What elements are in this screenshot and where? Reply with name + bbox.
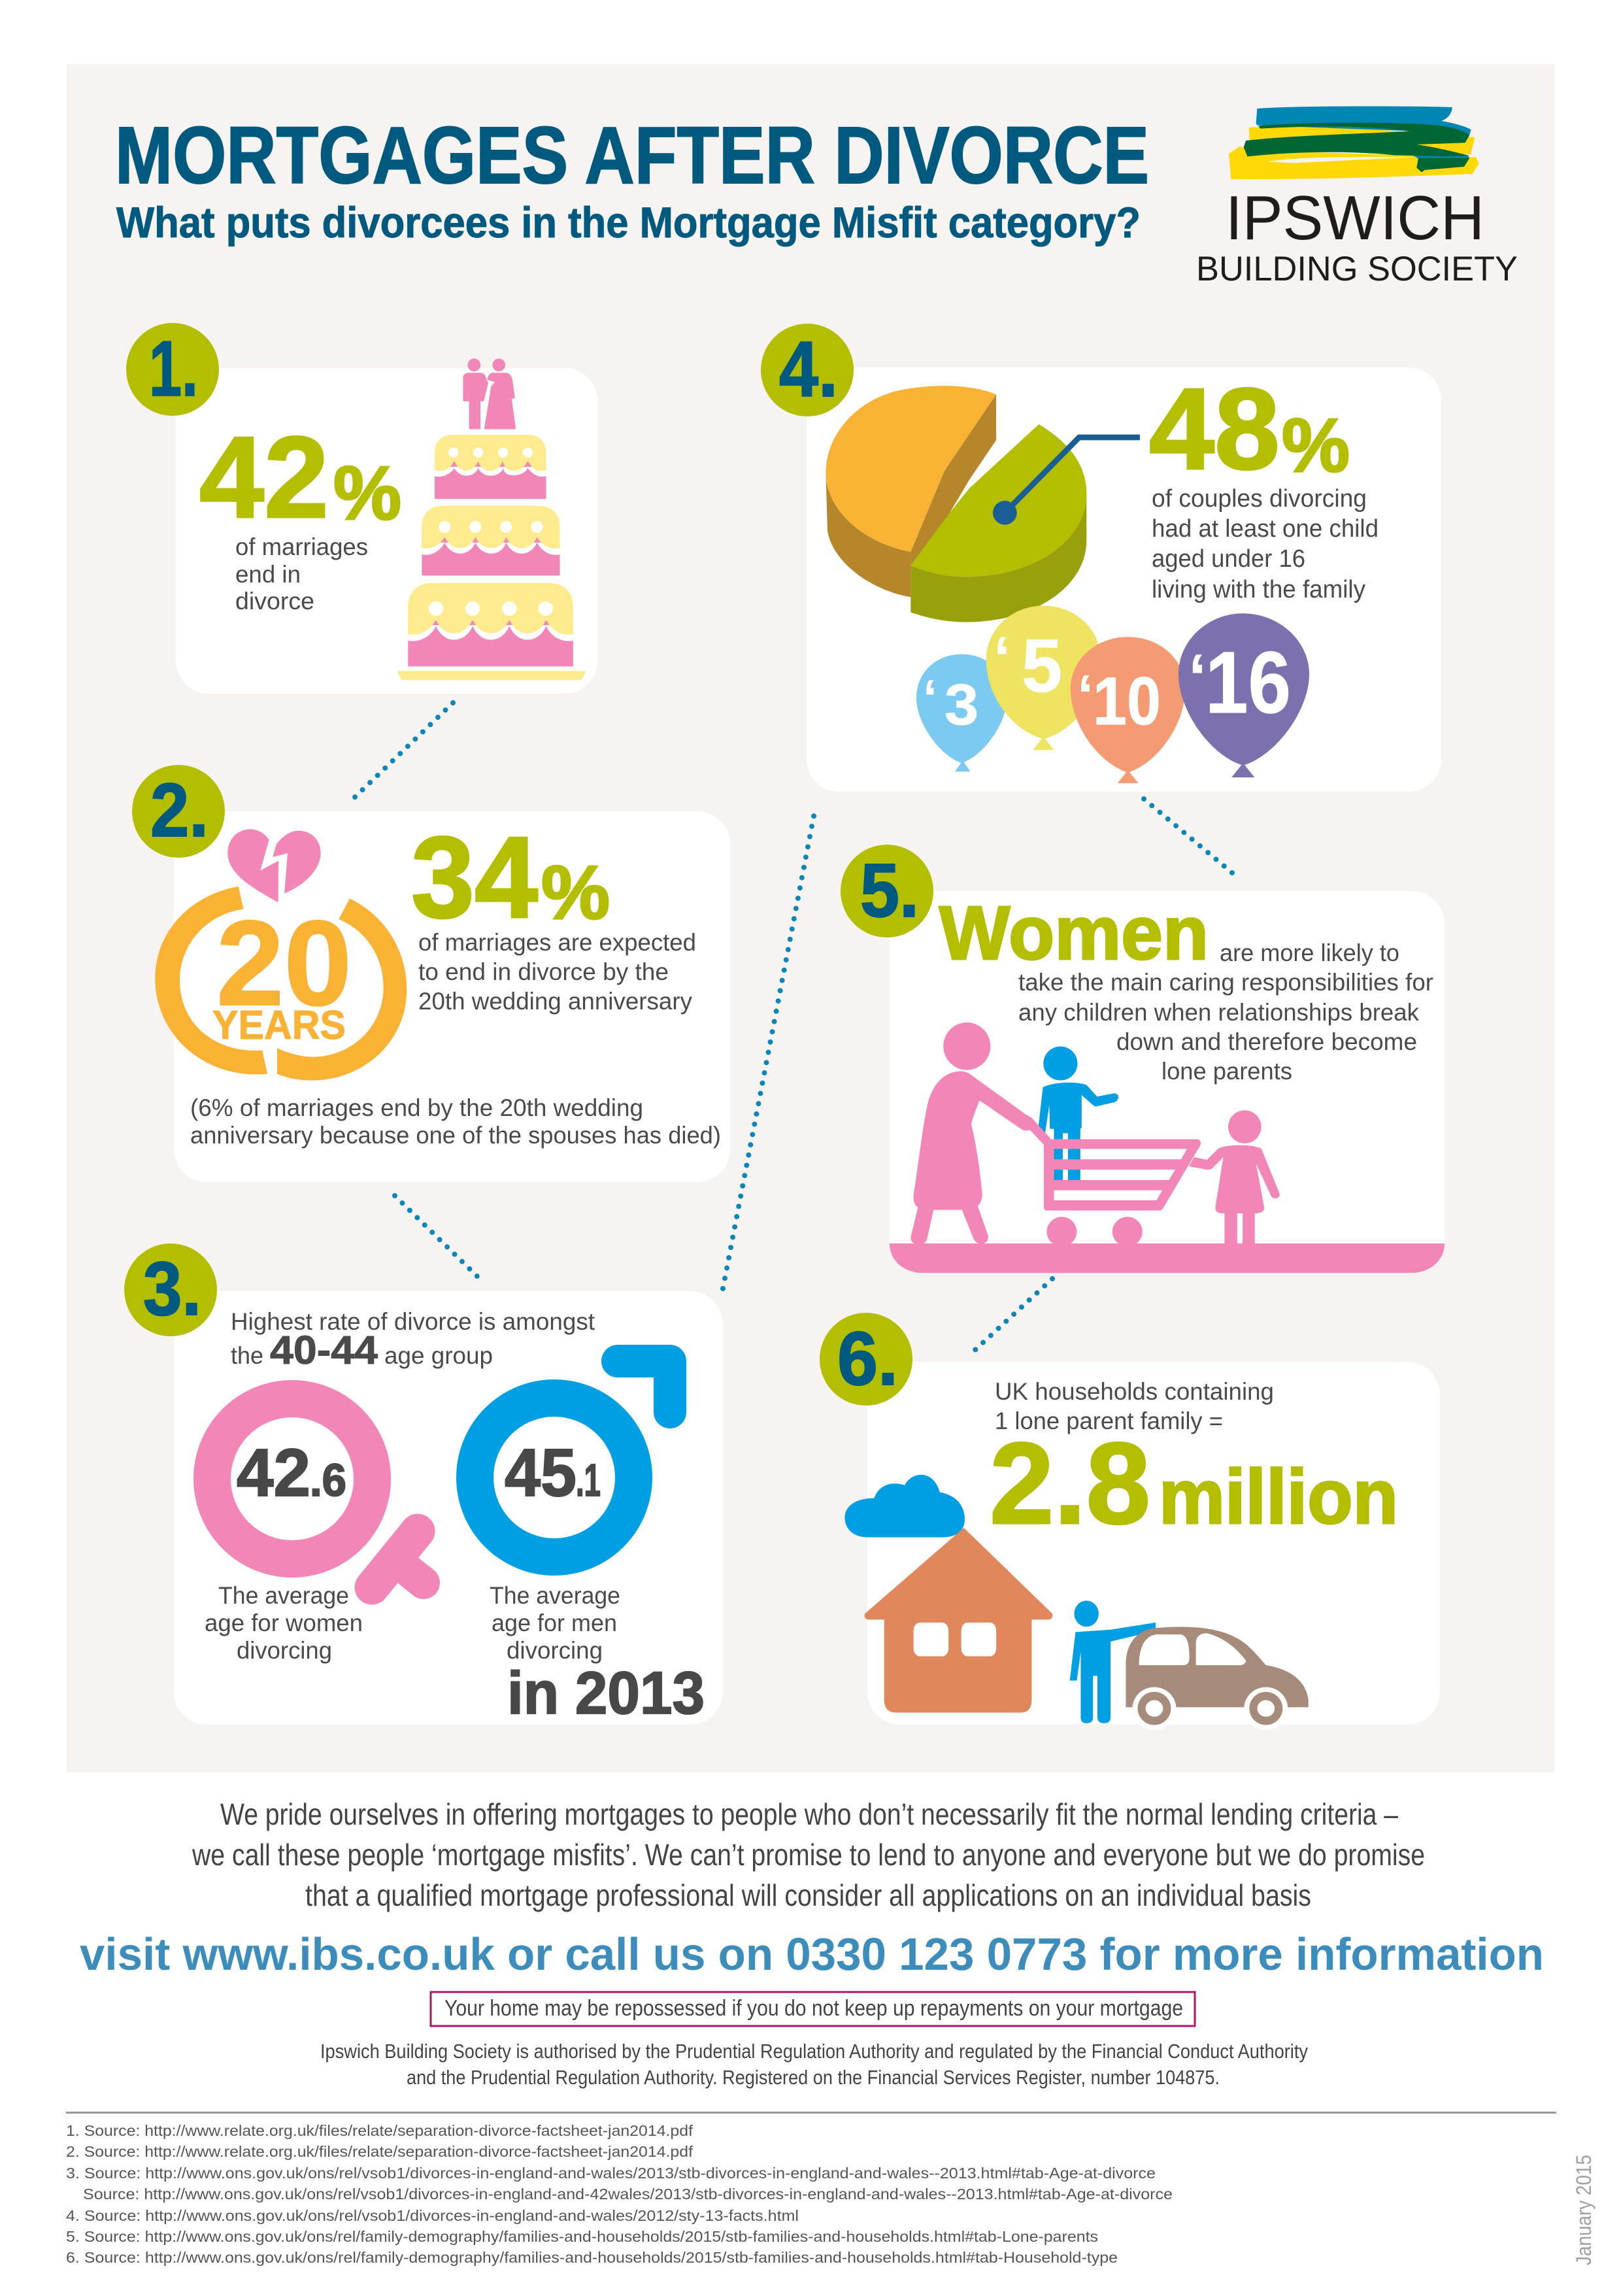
icon: cloud [844, 1475, 965, 1537]
text: in 2013: in 2013 [507, 1660, 705, 1727]
chart: women average age donut: 42 [237, 1435, 310, 1510]
note: 6% of marriages [190, 1094, 721, 1149]
source list: 4. Source: http://www.ons.gov.uk/ons/rel/vsob1/divorces-in-england-and-wales/2012/sty-13-facts.html [66, 2207, 799, 2224]
text: caring responsibilities: lone parents [1161, 1058, 1292, 1085]
logo: Ipswich Building Society: IPSWICH [1226, 183, 1484, 253]
text: average age for women: age for women [205, 1610, 363, 1636]
text: of marriages end in divorce: end in [235, 561, 301, 588]
cake tier 2 [422, 506, 560, 575]
text: of marriages end in divorce: divorce [235, 588, 314, 615]
logo: Ipswich Building Society: BUILDING SOCIETY [1196, 250, 1518, 288]
icon: balloon 5: 5 [1022, 624, 1062, 708]
panel 3: age at divorce [124, 1243, 723, 1727]
chart: men average age donut [475, 1361, 670, 1557]
text: average age for women: The average [218, 1582, 349, 1609]
badge 1: 1. [149, 325, 198, 413]
text: average age for women [205, 1582, 363, 1664]
source list: 6. Source: http://www.ons.gov.uk/ons/rel/family-demography/families-and-households/2015/stb-families-and-households.html#tab-Household-type [66, 2249, 1118, 2266]
logo: Ipswich Building Society [1196, 106, 1518, 288]
connector: 1 to 2 [350, 703, 453, 802]
icon: 20 years ring: 20 [216, 896, 352, 1031]
heading: Women: Women [939, 890, 1209, 975]
badge 5 [841, 845, 933, 937]
icon: balloon 10: ‘ [1077, 663, 1094, 728]
text: couples divorcing: had at least one child [1152, 515, 1379, 543]
stat 34% [411, 813, 610, 942]
icon: balloon 3 [916, 654, 1007, 771]
chart: women average age donut: .6 [310, 1455, 346, 1506]
text: of marriages end in divorce: of marriages [235, 533, 368, 560]
icon: balloon 5: ‘ [994, 625, 1011, 692]
text: highest rate of divorce: age group [384, 1342, 493, 1369]
stat 34%: % [541, 850, 610, 935]
stat 42%: % [333, 450, 401, 535]
badge 6: 6. [837, 1316, 898, 1401]
icon: balloon 10 [1071, 637, 1185, 783]
icon: car [1126, 1627, 1309, 1730]
regulatory text: and the Prudential Regulation Authority. Registered on the Financial Services Register, number 104875. [407, 2066, 1220, 2089]
text: average age for men: age for men [492, 1610, 617, 1636]
badge 3 [124, 1243, 217, 1336]
call to action: visit www.ibs.co.uk or call us on 0330 123 0773 for more information [80, 1929, 1544, 1980]
icon: wedding cake [397, 358, 586, 680]
stat: 2.8 million: million [1159, 1454, 1398, 1540]
badge 5: 5. [860, 848, 919, 933]
panel 4: 48% with children [761, 324, 1441, 792]
cake tier 1 [435, 435, 546, 499]
connector: 4 to 5 [1144, 799, 1240, 879]
text: highest rate of divorce [231, 1308, 595, 1372]
text: average age for men: The average [490, 1582, 620, 1609]
subtitle: What puts divorcees in the Mortgage Misfit category? [116, 198, 1141, 246]
warning box: Your home may be repossessed if you do not keep up repayments on your mortgage [444, 1996, 1183, 2021]
icon: 20 years ring [155, 886, 407, 1081]
icon: balloon 10: 10 [1093, 664, 1161, 739]
badge 3: 3. [143, 1246, 201, 1331]
stat 42% [199, 413, 401, 542]
text: couples divorcing: of couples divorcing [1152, 485, 1367, 513]
text: caring responsibilities: take the main caring responsibilities for [1018, 969, 1433, 996]
cake plate [397, 671, 586, 680]
ground band [890, 1243, 1445, 1273]
icon: house, cloud, person and car [844, 1475, 1309, 1730]
icon: broken heart [227, 829, 321, 903]
text: highest rate of divorce: 40-44 [270, 1328, 378, 1372]
text: UK households: 1 lone parent family = [995, 1408, 1223, 1434]
stat 48%: % [1282, 403, 1350, 488]
icon: brush strokes [1229, 106, 1479, 179]
chart: men average age donut: .1 [576, 1455, 601, 1506]
source list: 2. Source: http://www.relate.org.uk/files/relate/separation-divorce-factsheet-jan2014.pdf [66, 2143, 694, 2160]
panel 5: women lone parents [841, 845, 1445, 1273]
regulatory text: Ipswich Building Society is authorised by the Prudential Regulation Authority and regulated by the Financial Conduct Authority [320, 2040, 1308, 2063]
regulatory text [320, 2040, 1308, 2089]
badge 2 [132, 765, 225, 858]
background panel [67, 64, 1554, 1772]
icon: boy [1039, 1047, 1118, 1180]
icon: 20 years ring: YEARS [212, 1003, 346, 1048]
note: 6% of marriages: anniversary because one of the spouses has died) [190, 1122, 721, 1149]
badge 4: 4. [779, 326, 838, 413]
badge 1 [126, 323, 219, 416]
text: highest rate of divorce: Highest rate of divorce is amongst [231, 1308, 595, 1335]
text: average age for men: divorcing [507, 1637, 603, 1664]
chart: 3D pie [826, 386, 1140, 622]
connector: 3 to 4 [723, 809, 815, 1289]
stat 42%: 42 [199, 413, 329, 542]
icon: house [865, 1528, 1052, 1713]
badge 6 [820, 1313, 912, 1406]
stat 48%: 48 [1149, 364, 1280, 494]
source list [66, 2122, 1173, 2266]
badge 2: 2. [150, 768, 209, 853]
text: expected to end in divorce: of marriages are expected [418, 929, 696, 956]
text: mortgage misfits statement: We pride ourselves in offering mortgages to people who don’t necessarily fit the normal lending criteria – [220, 1797, 1398, 1831]
text: caring responsibilities: are more likely to [1220, 939, 1399, 966]
chart: women average age donut [212, 1399, 424, 1587]
icon: balloon 3: ‘ [923, 669, 937, 726]
text: caring responsibilities: any children when relationships break [1018, 999, 1419, 1026]
source list: 3. Source: http://www.ons.gov.uk/ons/rel/vsob1/divorces-in-england-and-wales/2013/stb-divorces-in-england-and-wales--2013.html#tab-Age-at-divorce [66, 2165, 1156, 2182]
icon: bride and groom topper [463, 358, 516, 430]
text: UK households: UK households containing [995, 1378, 1274, 1405]
icon: balloon 5 [986, 606, 1101, 750]
connector: 5 to 6 [970, 1279, 1052, 1355]
text: couples divorcing: aged under 16 [1152, 545, 1305, 573]
stat 48% [1149, 364, 1350, 494]
title: MORTGAGES AFTER DIVORCE [115, 111, 1149, 201]
icon: mother [911, 1022, 1050, 1244]
source list: 5. Source: http://www.ons.gov.uk/ons/rel/family-demography/families-and-households/2015/stb-families-and-households.html#tab-Lone-parents [66, 2228, 1098, 2245]
stat: 2.8 million [990, 1419, 1398, 1548]
icon: balloon 16: 16 [1205, 634, 1291, 732]
stat: 2.8 million: 2.8 [990, 1419, 1150, 1548]
icon: girl [1189, 1110, 1280, 1244]
cake tier 3 [408, 583, 573, 666]
icon: person [1070, 1600, 1156, 1723]
text: mortgage misfits statement: we call these people ‘mortgage misfits’. We can’t promise to lend to anyone and everyone but we do promise [192, 1838, 1425, 1872]
date: January 2015: January 2015 [1572, 2155, 1596, 2265]
text: UK households [995, 1378, 1274, 1434]
badge 4 [761, 324, 854, 416]
icon: balloon 16 [1178, 613, 1309, 777]
icon: shopping trolley [1044, 1140, 1201, 1247]
warning box [431, 1992, 1195, 2026]
stat 34%: 34 [411, 813, 538, 942]
text: caring responsibilities: down and therefore become [1116, 1028, 1417, 1055]
note: 6% of marriages: (6% of marriages end by the 20th wedding [190, 1094, 643, 1121]
icon: balloon 16: ‘ [1188, 641, 1207, 714]
text: of marriages end in divorce [235, 533, 368, 615]
text: mortgage misfits statement [192, 1797, 1425, 1912]
icon: family with shopping trolley [911, 1022, 1280, 1247]
text: couples divorcing [1152, 485, 1379, 603]
text: average age for men [490, 1582, 620, 1664]
text: highest rate of divorce: the [231, 1342, 263, 1369]
icon: balloon 3: 3 [944, 672, 978, 737]
text: mortgage misfits statement: that a qualified mortgage professional will consider all applications on an individual basis [305, 1878, 1311, 1912]
panel 6: lone parent households [820, 1313, 1440, 1730]
connector: 2 to 3 [395, 1196, 484, 1283]
source list: Source: http://www.ons.gov.uk/ons/rel/vsob1/divorces-in-england-and-42wales/2013/stb-divorces-in-england-and-wales--2013.html#tab-Age-at-divorce [83, 2186, 1173, 2203]
source list: 1. Source: http://www.relate.org.uk/files/relate/separation-divorce-factsheet-jan2014.pdf [66, 2122, 694, 2139]
text: expected to end in divorce: 20th wedding anniversary [418, 988, 692, 1015]
text: couples divorcing: living with the family [1152, 576, 1365, 603]
text: expected to end in divorce: to end in divorce by the [418, 958, 669, 985]
chart: men average age donut: 45 [505, 1435, 577, 1510]
text: caring responsibilities [1018, 939, 1433, 1085]
panel 2: 34% by 20th anniversary [132, 765, 730, 1182]
text: average age for women: divorcing [237, 1637, 332, 1664]
text: expected to end in divorce [418, 929, 696, 1015]
panel 1: 42% of marriages [126, 323, 597, 694]
